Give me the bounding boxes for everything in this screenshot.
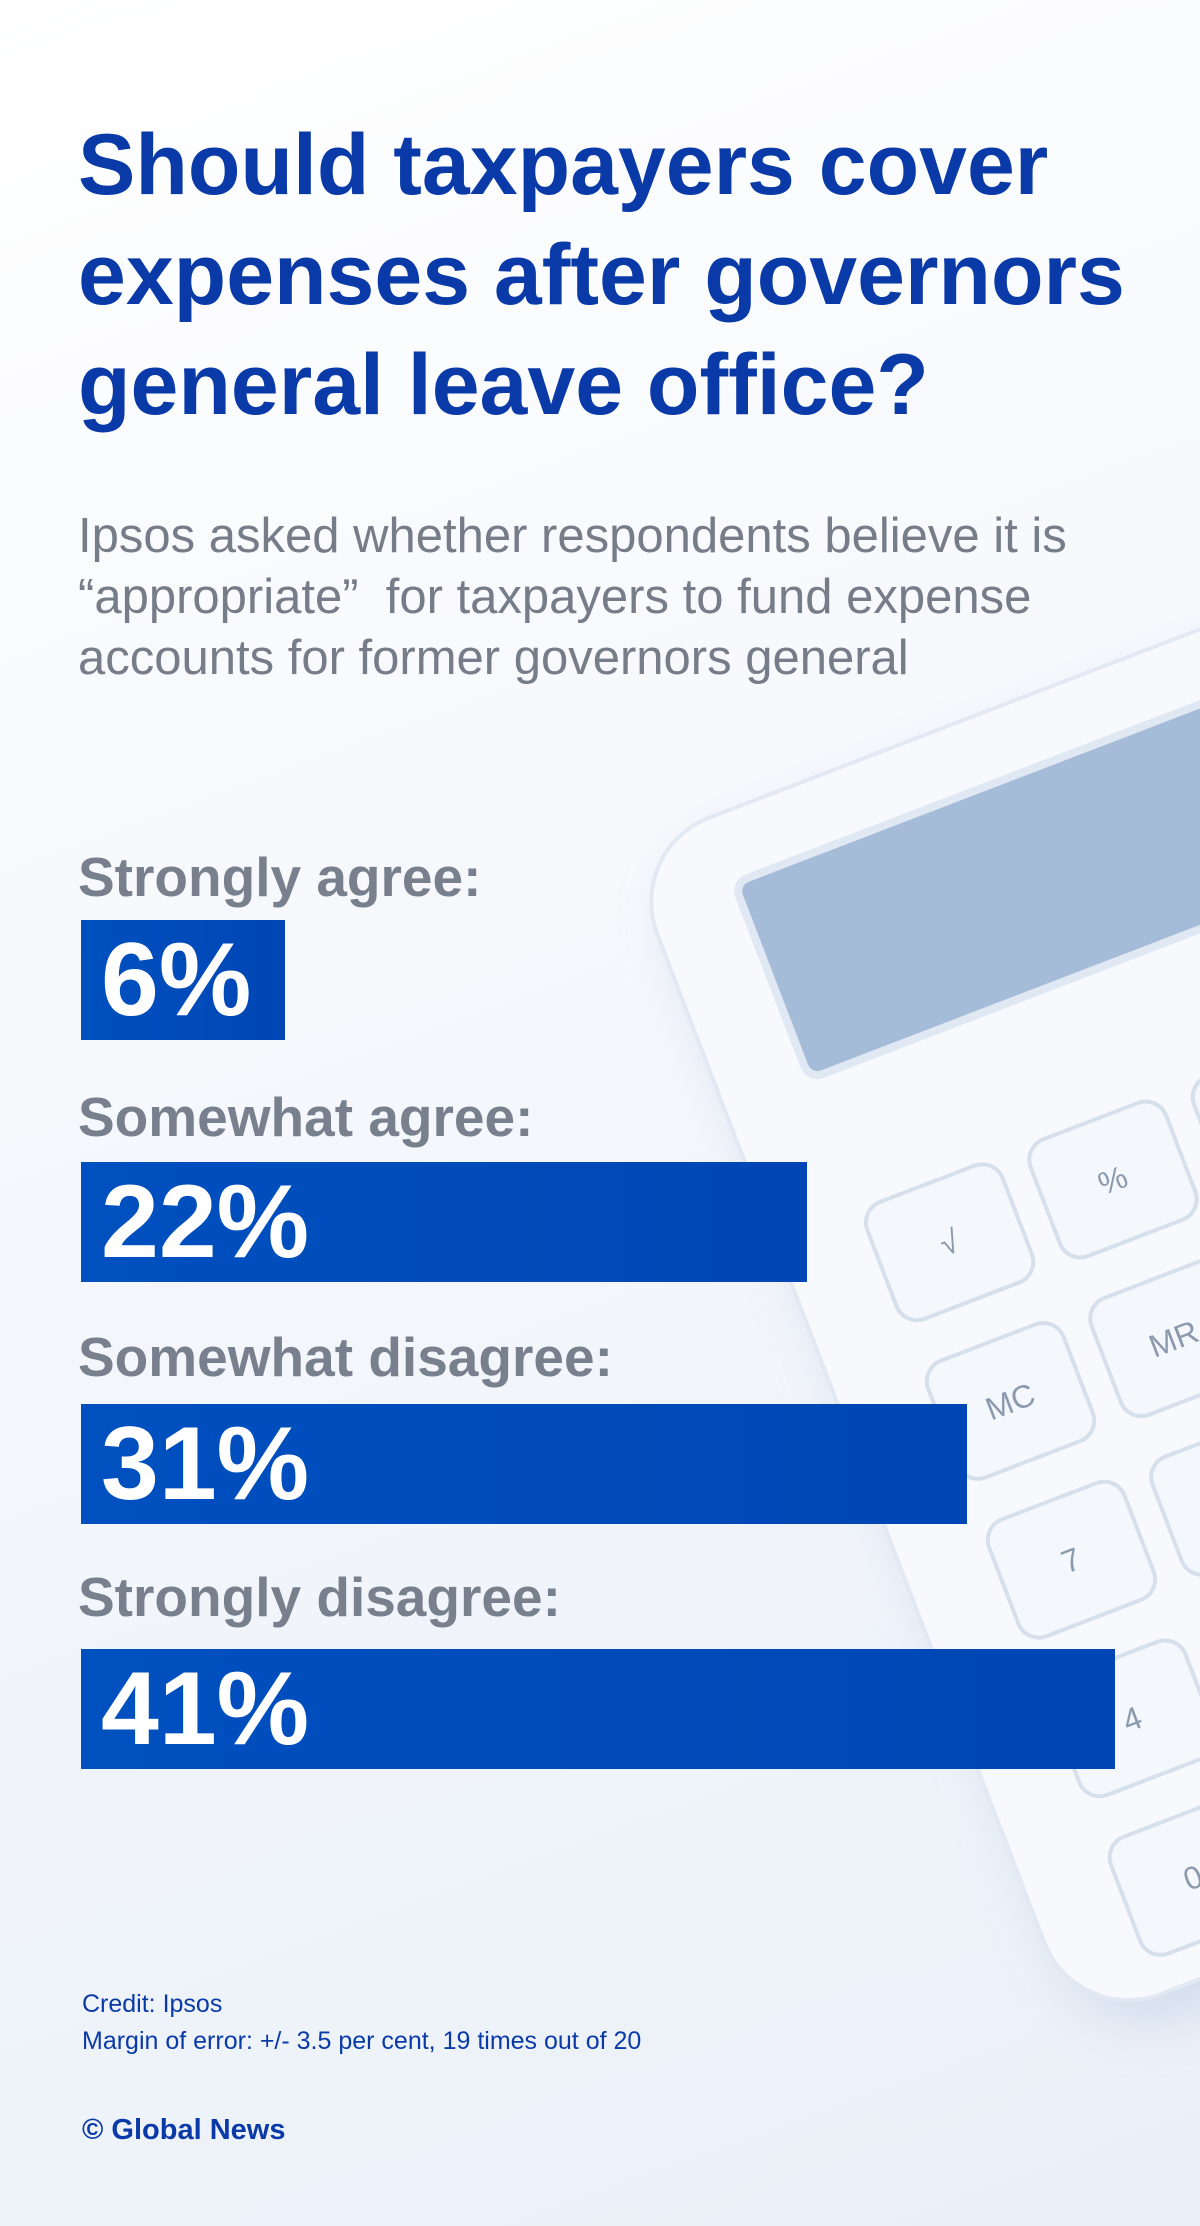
- bar: 41%: 41%: [101, 1651, 309, 1767]
- title: Should taxpayers cover expenses after governors general leave office?: [78, 117, 1125, 433]
- bar: 31%: [81, 1404, 967, 1524]
- bar: 6%: 6%: [101, 922, 251, 1038]
- bar: 22%: 22%: [101, 1164, 309, 1280]
- label: somewhat disagree: Somewhat disagree:: [78, 1326, 613, 1388]
- label: strongly disagree: Strongly disagree:: [78, 1566, 561, 1628]
- logo: Global News: © Global News: [82, 2114, 285, 2146]
- label: strongly agree: Strongly agree:: [78, 846, 481, 908]
- bar: 41%: [81, 1649, 1115, 1769]
- calculator illustration: 4: [1117, 1699, 1147, 1739]
- label: somewhat agree: Somewhat agree:: [78, 1086, 533, 1148]
- bar: 31%: 31%: [101, 1406, 309, 1522]
- credit text: Margin of error: +/- 3.5 per cent, 19 times out of 20: [82, 2027, 641, 2055]
- bar: 22%: [81, 1162, 807, 1282]
- credit text: Credit: Ipsos: [82, 1990, 222, 2018]
- calculator illustration: %: [1093, 1158, 1132, 1202]
- credit text: [82, 1990, 641, 2055]
- subtitle: Ipsos asked whether respondents believe it is “appropriate” for taxpayers to fund expense accounts for former governors general: [78, 509, 1067, 685]
- calculator illustration: 7: [1056, 1540, 1086, 1580]
- calculator illustration: MC: [981, 1376, 1040, 1427]
- calculator illustration: √: [935, 1223, 964, 1263]
